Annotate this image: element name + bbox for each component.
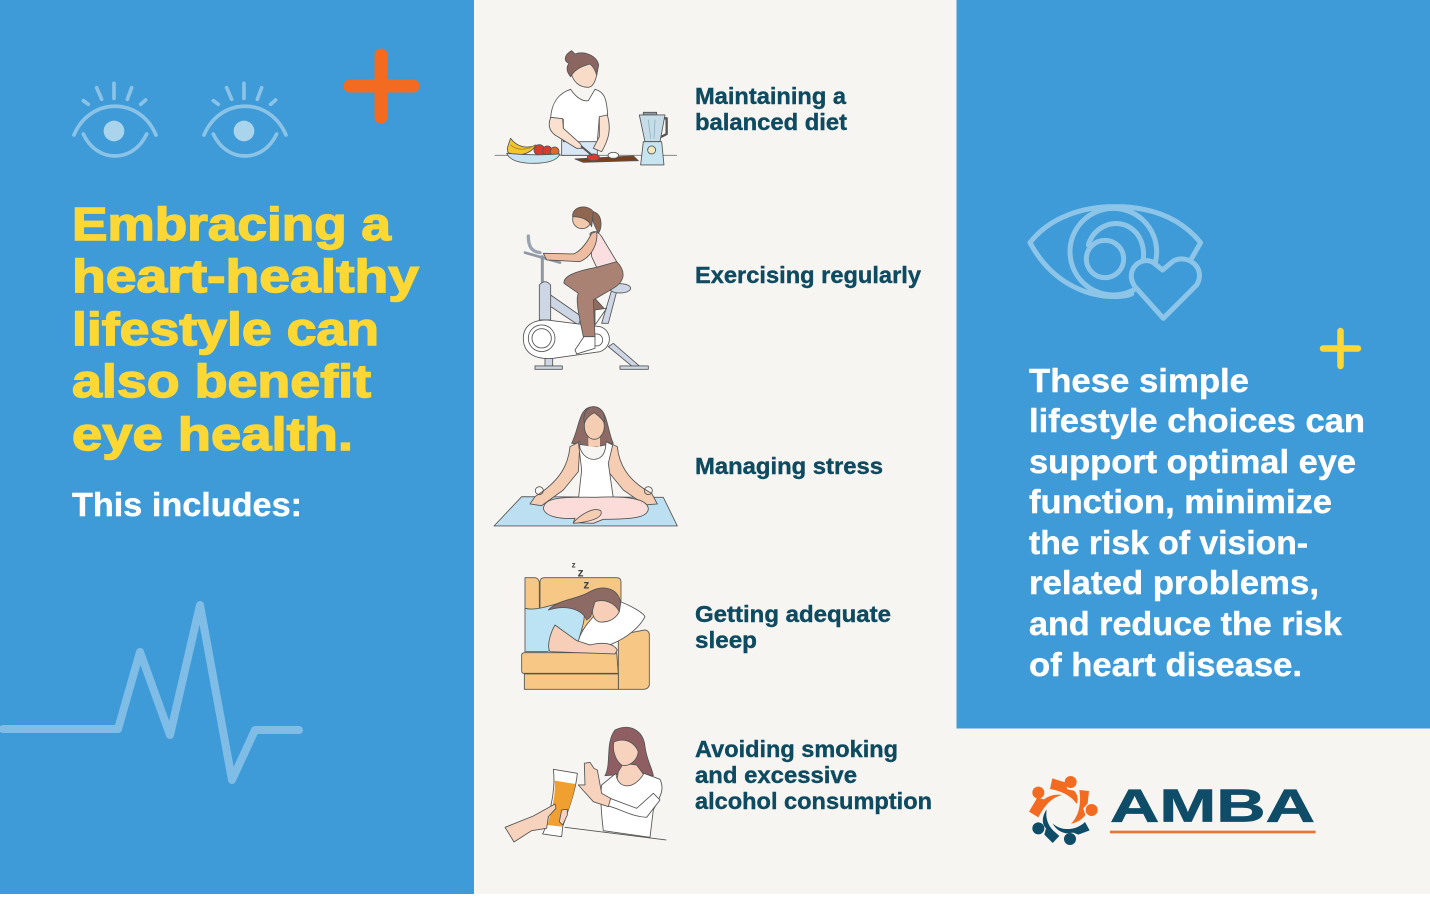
- heading: heart-healthy: [72, 250, 419, 302]
- label: balanced diet: Maintaining a: [695, 83, 846, 109]
- icon: heartbeat line: [3, 605, 299, 780]
- illustration: woman sleeping on sofa: z: [583, 577, 589, 591]
- illustration: woman sleeping on sofa: z: [572, 560, 576, 569]
- label: balanced diet: [695, 83, 847, 135]
- text block: closing statement: of heart disease.: [1029, 646, 1302, 683]
- illustration: woman sleeping on sofa: z: [578, 565, 584, 579]
- illustration: woman on exercise bike: [523, 207, 648, 369]
- logo: AMBA: AMBA: [1110, 780, 1315, 832]
- heading: eye health.: [72, 408, 353, 460]
- panel: right blue: [956, 0, 1430, 728]
- label: adequate sleep: Getting adequate: [695, 601, 891, 627]
- label: avoiding smoking and alcohol: alcohol consumption: [695, 788, 932, 814]
- illustration: woman sleeping on sofa: [522, 560, 649, 689]
- heading: also benefit: [72, 355, 371, 407]
- label: avoiding smoking and alcohol: and excessive: [695, 762, 857, 788]
- logo: AMBA: [1029, 776, 1316, 845]
- heading: lifestyle can: [72, 303, 379, 355]
- icon: yellow plus: [1323, 331, 1358, 366]
- heading: [72, 198, 419, 460]
- text block: closing statement: [1029, 362, 1365, 683]
- icon: orange plus: [350, 55, 413, 117]
- illustration: woman refusing beer: [505, 727, 666, 842]
- text block: closing statement: the risk of vision-: [1029, 524, 1308, 561]
- icon: two eyes: [74, 83, 286, 156]
- text block: closing statement: lifestyle choices can: [1029, 402, 1365, 439]
- text block: closing statement: and reduce the risk: [1029, 605, 1343, 642]
- text block: closing statement: related problems,: [1029, 564, 1319, 601]
- heading: Embracing a: [72, 198, 391, 250]
- label: balanced diet: balanced diet: [695, 109, 847, 135]
- label: adequate sleep: [695, 601, 891, 653]
- label: exercising: Exercising regularly: [695, 262, 921, 288]
- label: avoiding smoking and alcohol: [695, 736, 932, 814]
- illustration: woman meditating: [494, 407, 677, 526]
- text block: closing statement: support optimal eye: [1029, 443, 1356, 480]
- illustration: woman preparing food: [495, 51, 677, 165]
- text block: closing statement: These simple: [1029, 362, 1249, 399]
- subheading: This includes:: [72, 486, 302, 523]
- panel: left blue: [0, 0, 474, 894]
- label: adequate sleep: sleep: [695, 627, 757, 653]
- text block: closing statement: function, minimize: [1029, 483, 1332, 520]
- label: avoiding smoking and alcohol: Avoiding smoking: [695, 736, 898, 762]
- icon: eye with heart: [1030, 207, 1201, 318]
- label: managing stress: Managing stress: [695, 453, 883, 479]
